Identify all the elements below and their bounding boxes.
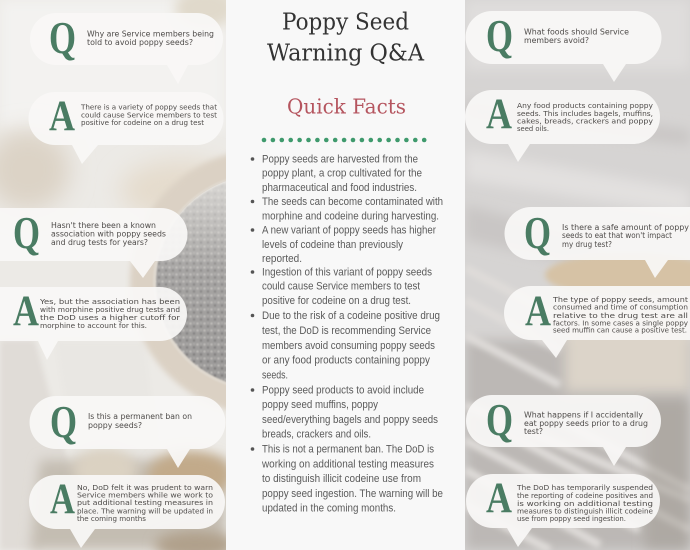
speech bubble: question safe amount: seeds to eat that won't impact [562, 231, 672, 240]
speech bubble: answer temporarily suspended: measures to distinguish illicit codeine [517, 506, 653, 516]
speech bubble: answer prudent to warn: the coming months [77, 514, 146, 523]
speech bubble: answer prudent to warn: place. The warning will be updated in [77, 506, 213, 516]
bullet list: quick facts: poppy seed muffins, poppy [262, 399, 379, 411]
bullet list: quick facts: updated in the coming months. [262, 502, 396, 514]
speech bubble: question why avoid poppy seeds [30, 12, 223, 84]
speech bubble: answer any food products: A [486, 91, 512, 138]
speech bubble: answer type of poppy seeds: relative to the drug test are all [553, 311, 688, 320]
speech bubble: answer temporarily suspended: A [486, 475, 512, 522]
panel: right photo background of poppy seed muffin [465, 0, 690, 550]
speech bubble: answer variety of poppy seeds: A [49, 93, 75, 140]
bullet list: quick facts: pharmaceutical and food industries. [262, 182, 417, 194]
speech bubble: answer prudent to warn: No, DoD felt it was prudent to warn [77, 483, 213, 492]
speech bubble: question what foods: Q [486, 10, 513, 61]
bullet list: quick facts: This is not a permanent ban. The DoD is [262, 444, 434, 456]
speech bubble: question safe amount: Q [524, 207, 551, 258]
speech bubble: answer morphine positive tests: the DoD uses a higher cutoff for [40, 313, 181, 322]
speech bubble: question permanent ban: Is this a permanent ban on [88, 412, 192, 421]
bullet list: quick facts: members avoid consuming poppy seeds [262, 340, 435, 352]
dotted divider [262, 138, 427, 142]
bullet list: quick facts: could cause Service members to test [262, 280, 420, 292]
speech bubble: question known association: association with poppy seeds [51, 230, 166, 238]
speech bubble: answer any food products: Any food products containing poppy [517, 101, 654, 110]
speech bubble: answer type of poppy seeds: consumed and time of consumption [553, 302, 688, 312]
bullet list: quick facts: The seeds can become contaminated with [262, 196, 443, 208]
speech bubble: answer prudent to warn [29, 475, 225, 548]
speech bubble: answer temporarily suspended: The DoD has temporarily suspended [516, 483, 653, 492]
bullet list: quick facts: Poppy seeds are harvested from the [262, 154, 418, 166]
bullet list: quick facts: A new variant of poppy seeds has higher [262, 224, 436, 236]
speech bubble: question accidentally eat: Q [486, 394, 513, 445]
speech bubble: answer type of poppy seeds: factors. In some cases a single poppy [553, 318, 689, 328]
bullet list: quick facts: seed/everything bagels and poppy seeds [262, 414, 438, 426]
bullet list: quick facts: Ingestion of this variant of poppy seeds [262, 266, 432, 278]
speech bubble: question known association [0, 207, 188, 278]
speech bubble: question what foods [466, 10, 662, 82]
speech bubble: question safe amount: Is there a safe amount of poppy [562, 223, 689, 232]
speech bubble: question what foods: members avoid? [524, 36, 589, 45]
bullet list: quick facts: reported. [262, 253, 302, 265]
speech bubble: question why avoid poppy seeds: Q [49, 12, 76, 63]
bullet list: quick facts: levels of codeine than previously [262, 239, 404, 251]
speech bubble: answer type of poppy seeds: seed muffin can cause a positive test. [553, 326, 687, 334]
bullet list: quick facts: to distinguish illicit codeine use from [262, 473, 421, 485]
speech bubble: answer temporarily suspended [466, 474, 660, 547]
speech bubble: question accidentally eat: What happens if I accidentally [524, 410, 643, 420]
title [267, 8, 425, 66]
bullet list: quick facts: Poppy seed products to avoid include [262, 384, 424, 396]
bullet list: quick facts: or any food products containing poppy [262, 354, 431, 366]
speech bubble: answer temporarily suspended: use from poppy seed ingestion. [517, 514, 626, 523]
speech bubble: answer variety of poppy seeds [28, 92, 223, 164]
speech bubble: answer prudent to warn: put additional testing measures in [77, 498, 213, 507]
speech bubble: question known association: Hasn't there been a known [51, 221, 156, 230]
bullet list: quick facts: poppy plant, a crop cultivated for the [262, 168, 422, 180]
speech bubble: answer morphine positive tests: morphine to account for this. [40, 321, 147, 330]
speech bubble: answer temporarily suspended: the reporting of codeine positives and [517, 491, 653, 500]
panel: left photo background of poppy seed bowl [0, 0, 226, 550]
bullet list: quick facts: Due to the risk of a codeine positive drug [262, 310, 440, 322]
speech bubble: question why avoid poppy seeds: Why are Service members being [87, 30, 214, 38]
bullet list: quick facts: breads, crackers and oils. [262, 428, 371, 440]
speech bubble: answer type of poppy seeds [504, 286, 690, 358]
bullet list: quick facts: positive for codeine on a drug test. [262, 295, 411, 307]
speech bubble: answer type of poppy seeds: The type of poppy seeds, amount [552, 295, 688, 304]
speech bubble: answer morphine positive tests [0, 287, 187, 360]
speech bubble: answer any food products: seed oils. [517, 124, 549, 133]
speech bubble: question known association: Q [13, 207, 40, 258]
speech bubble: question accidentally eat: test? [524, 427, 543, 436]
speech bubble: question accidentally eat: eat poppy seeds prior to a drug [524, 419, 648, 428]
speech bubble: question permanent ban: poppy seeds? [88, 421, 142, 430]
speech bubble: answer temporarily suspended: is working on additional testing [517, 499, 653, 508]
speech bubble: answer variety of poppy seeds: There is a variety of poppy seeds that [80, 102, 217, 112]
speech bubble: answer morphine positive tests: A [13, 288, 39, 335]
panel: center quick facts column [226, 0, 465, 550]
speech bubble: answer any food products: cakes, breads, crackers and poppy [517, 116, 654, 126]
speech bubble: answer morphine positive tests: with morphine positive drug tests and [40, 305, 180, 314]
speech bubble: answer type of poppy seeds: A [525, 288, 551, 335]
title: Warning Q&A [267, 38, 425, 66]
speech bubble: question permanent ban [30, 396, 225, 468]
speech bubble: answer prudent to warn: Service members while we work to [77, 490, 213, 500]
bullet list: quick facts: poppy seed ingestion. The warning will be [262, 488, 443, 500]
speech bubble: answer variety of poppy seeds: positive for codeine on a drug test [81, 118, 204, 127]
title: Poppy Seed [282, 8, 409, 36]
speech bubble: question known association: and drug tests for years? [51, 238, 148, 247]
speech bubble: question what foods: What foods should Service [524, 28, 629, 36]
bullet list: quick facts [251, 154, 443, 514]
speech bubble: answer prudent to warn: A [50, 476, 75, 523]
bullet list: quick facts: working on additional testing measures [261, 458, 434, 470]
bullet list: quick facts: seeds. [262, 370, 288, 382]
bullet list: quick facts: test, the DoD is recommending Service [262, 325, 431, 337]
speech bubble: answer any food products [465, 90, 660, 162]
speech bubble: question safe amount [505, 207, 690, 278]
speech bubble: answer any food products: seeds. This includes bagels, muffins, [517, 109, 653, 118]
speech bubble: question accidentally eat [466, 394, 661, 466]
speech bubble: question why avoid poppy seeds: told to avoid poppy seeds? [87, 38, 193, 47]
speech bubble: answer morphine positive tests: Yes, but the association has been [39, 297, 180, 306]
speech bubble: answer variety of poppy seeds: could cause Service members to test [81, 110, 217, 120]
speech bubble: question permanent ban: Q [50, 396, 77, 447]
bullet list: quick facts: morphine and codeine during harvesting. [262, 210, 439, 222]
speech bubble: question safe amount: my drug test? [562, 240, 612, 249]
heading: quick facts: Quick Facts [287, 94, 406, 118]
